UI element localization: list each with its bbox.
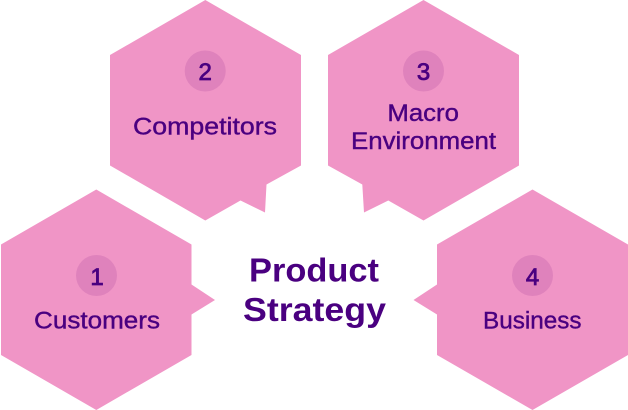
label: Competitors: Competitors xyxy=(133,114,277,140)
number badge 4: 4 xyxy=(526,264,539,291)
number badge 4 xyxy=(512,255,553,296)
label: Macro Environment xyxy=(351,100,496,155)
number badge 1 xyxy=(76,255,117,296)
panel: competitors hexagon xyxy=(110,0,301,220)
label: Macro Environment: Environment xyxy=(351,128,496,155)
panel: macro environment hexagon xyxy=(328,0,519,220)
hexagon shape with speech tail xyxy=(328,0,519,220)
panel: business hexagon xyxy=(414,190,628,410)
title: Product Strategy: Strategy xyxy=(243,291,387,328)
number badge 2: 2 xyxy=(199,59,212,86)
label: Business: Business xyxy=(483,308,582,335)
label: Customers: Customers xyxy=(34,308,160,335)
title: Product Strategy xyxy=(243,252,387,328)
panel: customers hexagon xyxy=(1,190,215,410)
hexagon shape with speech tail xyxy=(414,190,628,410)
number badge 2 xyxy=(185,50,226,92)
hexagon shape with speech tail xyxy=(110,0,301,220)
hexagon shape with speech tail xyxy=(1,190,215,410)
number badge 3: 3 xyxy=(417,59,430,86)
number badge 3 xyxy=(403,50,444,92)
number badge 1: 1 xyxy=(90,264,104,291)
title: Product Strategy: Product xyxy=(249,252,379,289)
label: Macro Environment: Macro xyxy=(387,100,459,127)
